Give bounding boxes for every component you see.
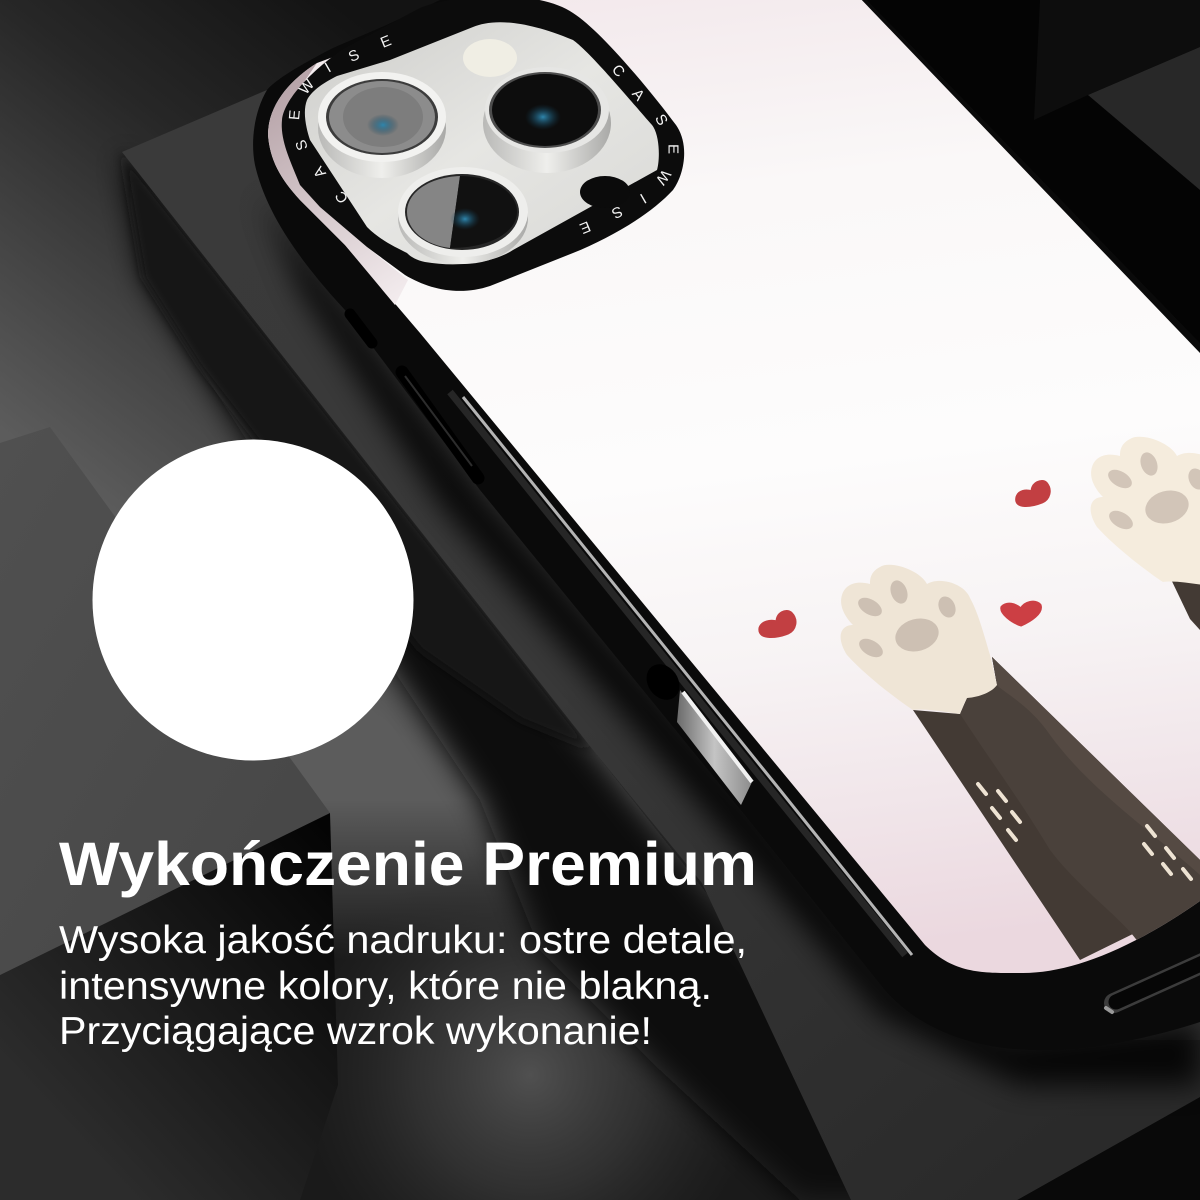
description text: Wysoka jakość nadruku: ostre detale, (59, 919, 747, 962)
microphone hole (580, 176, 630, 208)
cat arm right (1172, 582, 1200, 630)
ring branding text: E (664, 144, 682, 154)
description text (59, 919, 747, 1053)
ring branding text: A (628, 86, 648, 104)
lower left block (0, 427, 338, 1200)
camera island (282, 0, 684, 291)
ring branding text: W (296, 75, 319, 98)
heart top (1017, 481, 1049, 506)
description text: Przyciągające wzrok wykonanie! (59, 1010, 652, 1053)
ring branding text: S (609, 202, 625, 222)
power button silver (677, 690, 752, 805)
phone case body (253, 0, 1200, 1050)
volume button (402, 372, 478, 478)
phone back printed panel (268, 0, 1200, 973)
cat arm left (913, 657, 1200, 960)
heart left (760, 611, 795, 637)
ring branding text: A (310, 163, 330, 181)
lens top left (318, 72, 446, 178)
phone shadow (262, 195, 1200, 1085)
cat paw left (841, 565, 997, 714)
power button recess (640, 658, 686, 706)
flash (463, 39, 517, 77)
charging port (1114, 962, 1200, 1003)
lens bottom (398, 167, 528, 264)
ring branding text: W (651, 166, 674, 188)
bottom right dark floor (1017, 1097, 1200, 1200)
ring branding text: S (292, 137, 312, 153)
ring branding text: E (378, 32, 394, 52)
ring branding text: C (332, 188, 352, 206)
ring branding text: E (577, 217, 593, 237)
lens top right (483, 67, 611, 173)
description text: intensywne kolory, które nie blakną. (59, 965, 712, 1008)
ring branding text: I (322, 60, 334, 76)
heading: Wykończenie Premium (59, 830, 757, 898)
top right dark area and block (852, 0, 1200, 400)
ring branding text: S (346, 46, 362, 66)
heart middle (1002, 602, 1040, 625)
pink rim strip near camera (268, 63, 408, 305)
ring branding text: S (651, 111, 671, 129)
ring branding text: C (608, 61, 628, 81)
cat paw right (1091, 437, 1200, 586)
silver rim highlight (450, 392, 912, 955)
ring branding text: I (637, 190, 649, 206)
camera glass (305, 22, 659, 264)
white circle (92, 440, 414, 760)
mute switch (350, 314, 372, 343)
side buttons (350, 314, 1200, 1012)
artwork: cat paws and hearts (760, 437, 1200, 960)
ring branding text: E (286, 109, 304, 121)
ring branding text (286, 32, 682, 237)
